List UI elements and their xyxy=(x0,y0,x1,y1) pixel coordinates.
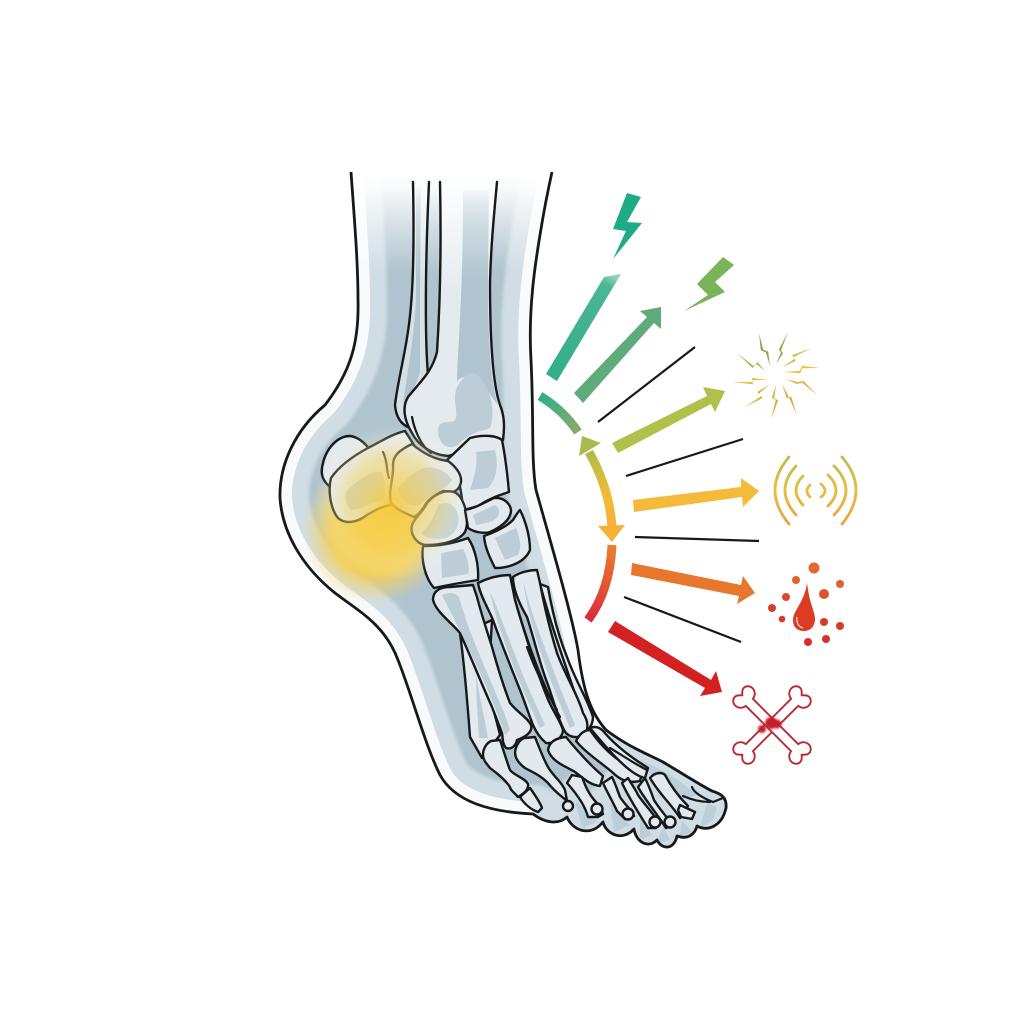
foot bones xyxy=(322,431,723,828)
icon: blood drop with particles xyxy=(768,562,844,646)
leg bones xyxy=(395,182,504,456)
cuneiform upper xyxy=(465,498,511,533)
arc: double-headed yellow arrow xyxy=(579,436,625,542)
pain progression arrows xyxy=(540,274,759,696)
pain glow xyxy=(304,482,426,602)
fibula xyxy=(395,182,429,428)
arrow: red xyxy=(608,621,722,696)
arc: orange-red segment xyxy=(588,545,612,620)
metatarsal 1 xyxy=(433,585,531,748)
toe 2 xyxy=(515,737,573,811)
toe 5 xyxy=(590,727,660,828)
bone glow overlay xyxy=(322,430,468,576)
top foot lines xyxy=(610,748,647,770)
foot illustration xyxy=(270,165,740,860)
interosseous lines xyxy=(517,607,560,717)
navicular xyxy=(445,436,509,510)
toe 6 xyxy=(638,778,676,828)
bar: teal xyxy=(546,274,621,381)
toe 1 xyxy=(483,740,542,812)
metatarsal 3 xyxy=(478,575,563,743)
arrow: yellow-green xyxy=(612,387,725,453)
toe 3 xyxy=(548,737,603,817)
icon: starburst xyxy=(732,332,820,419)
arrow: green xyxy=(574,307,661,403)
icon: teal lightning bolt xyxy=(613,193,642,259)
big toe xyxy=(650,773,723,819)
metatarsal 4 xyxy=(513,570,587,737)
divider lines xyxy=(598,347,759,642)
metatarsal 2 xyxy=(460,620,500,758)
icon: crossed bones xyxy=(731,684,813,766)
soft tissue fill xyxy=(292,189,725,846)
talus xyxy=(390,444,461,517)
calcaneus xyxy=(330,431,414,522)
icon: green lightning bolt xyxy=(684,257,734,311)
toenail xyxy=(683,787,723,802)
arrow: yellow xyxy=(633,478,759,512)
tibia xyxy=(405,182,504,456)
arc: green segment xyxy=(540,396,578,432)
toe 4 xyxy=(576,730,642,820)
top fade xyxy=(363,172,540,262)
foot outline xyxy=(280,172,726,847)
calcaneus back xyxy=(322,436,370,490)
lower tarsal xyxy=(422,538,478,588)
metatarsal 5 xyxy=(540,584,593,731)
icon: vibration waves xyxy=(775,457,856,524)
arrow: orange xyxy=(631,563,755,604)
cuboid xyxy=(412,491,467,545)
toe shading xyxy=(575,760,717,844)
cuneiform lower xyxy=(484,510,530,568)
